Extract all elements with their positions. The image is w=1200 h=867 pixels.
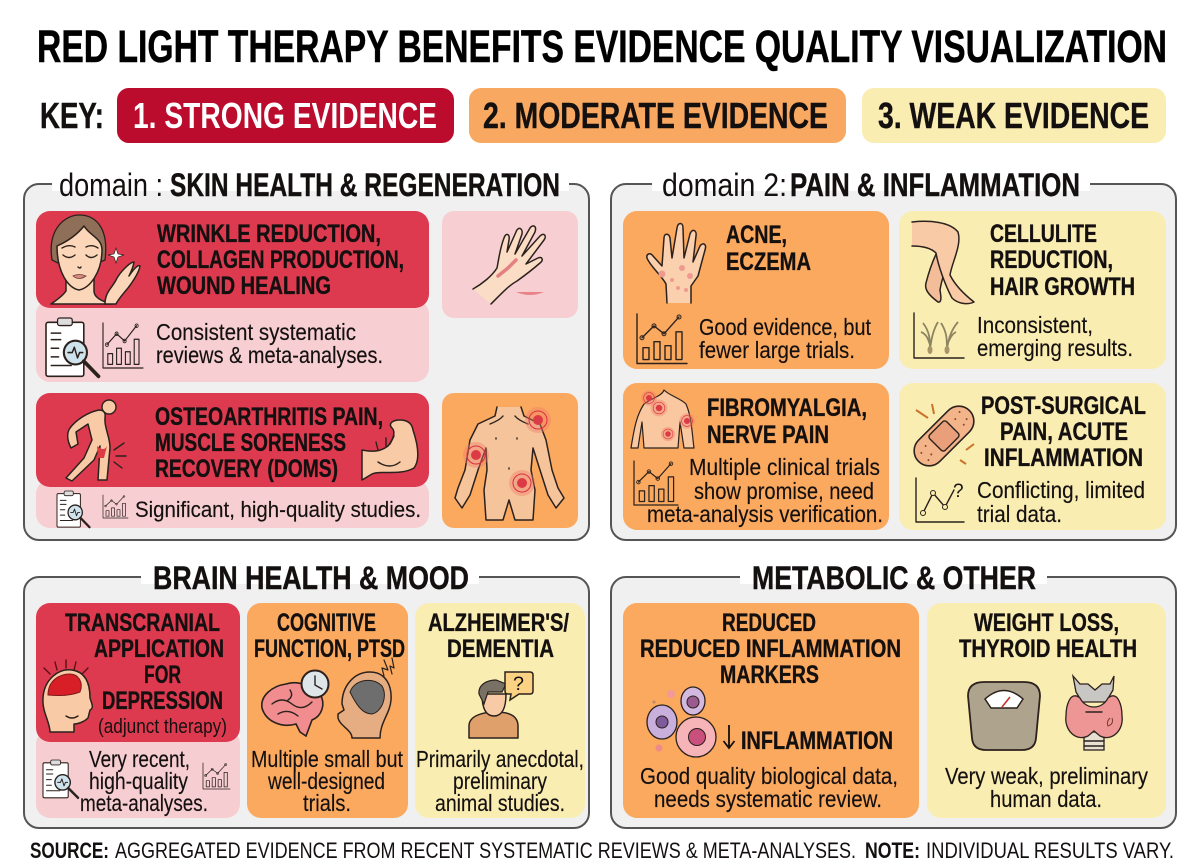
heading: alzheimer's: [428, 609, 569, 663]
heading: transcranial application: APPLICATION: [94, 635, 224, 663]
legend key: KEY:: [40, 95, 104, 136]
icon: chart: [203, 763, 230, 789]
key: strong evidence: [117, 88, 454, 143]
heading: weight loss: THYROID HEALTH: [959, 635, 1137, 663]
footer: source and note: SOURCE:: [30, 838, 109, 863]
text: inflammation evidence: needs systematic review.: [654, 786, 882, 812]
text: post-surgical evidence: Conflicting, limited: [977, 477, 1145, 503]
label: arrow and inflammation: [724, 725, 893, 755]
heading: cellulite hair growth: HAIR GROWTH: [990, 273, 1135, 301]
heading: fibromyalgia nerve pain: FIBROMYALGIA,: [707, 394, 867, 422]
icon: bandage: [908, 400, 980, 472]
text: alzheimer's evidence: Primarily anecdotal,: [416, 746, 584, 772]
icon: hair follicles chart: [914, 313, 964, 358]
label: arrow and inflammation: INFLAMMATION: [741, 727, 893, 755]
legend key: [40, 88, 1166, 143]
panel: brain health and mood: [24, 560, 589, 828]
heading: reduced inflammation: [640, 609, 901, 689]
card: depression evidence background: [36, 730, 240, 818]
card: acne eczema: [623, 211, 889, 369]
heading: alzheimer's: ALZHEIMER'S/: [428, 609, 569, 637]
card: fibromyalgia nerve pain: [623, 383, 889, 530]
heading: reduced inflammation: MARKERS: [720, 661, 819, 689]
heading: post-surgical pain: INFLAMMATION: [984, 444, 1143, 472]
heading: transcranial application: TRANSCRANIAL: [65, 609, 220, 637]
card: post-surgical pain: [899, 383, 1166, 530]
heading: wrinkle reduction: WOUND HEALING: [157, 272, 331, 300]
heading: metabolic: METABOLIC & OTHER: [752, 560, 1036, 596]
heading: cellulite hair growth: REDUCTION,: [990, 246, 1113, 274]
heading: alzheimer's: DEMENTIA: [447, 635, 554, 663]
heading: transcranial application: DEPRESSION: [102, 687, 223, 715]
text: cognitive evidence: Multiple small but: [251, 746, 404, 772]
text: depression evidence: [80, 746, 208, 816]
heading: cognitive function: [254, 609, 405, 663]
icon: clipboard with magnifier: [57, 491, 90, 527]
heading: transcranial application: FOR: [144, 661, 181, 689]
text: fibromyalgia evidence: show promise, need: [694, 478, 874, 504]
heading: osteoarthritis pain: MUSCLE SORENESS: [155, 429, 346, 457]
heading: skin health: SKIN HEALTH & REGENERATION: [170, 167, 560, 203]
panel: skin health and regeneration: [24, 167, 589, 540]
text: wrinkle evidence: reviews & meta-analyses.: [156, 342, 383, 368]
heading: fibromyalgia nerve pain: [707, 394, 867, 449]
text: alzheimer's evidence: preliminary: [453, 768, 547, 794]
card: weight loss thyroid: [927, 603, 1166, 818]
icon: cells: [647, 687, 716, 757]
heading: acne eczema: ECZEMA: [726, 248, 811, 276]
icon: chart: [103, 495, 128, 518]
text: cellulite evidence: Inconsistent,: [977, 312, 1093, 338]
heading: osteoarthritis pain: OSTEOARTHRITIS PAIN,: [155, 403, 383, 431]
heading: wrinkle reduction: COLLAGEN PRODUCTION,: [157, 246, 404, 274]
text: depression evidence: Very recent,: [89, 746, 190, 772]
heading: acne eczema: [726, 221, 811, 276]
icon: brain and clock: [262, 670, 328, 736]
card: cellulite hair growth: [899, 211, 1166, 369]
key: moderate evidence: [469, 88, 846, 143]
heading: cellulite hair growth: [990, 220, 1135, 301]
text: acne evidence: [699, 314, 872, 363]
heading: cellulite hair growth: CELLULITE: [990, 220, 1097, 248]
heading: weight loss: WEIGHT LOSS,: [974, 609, 1119, 637]
icon: chart: [634, 461, 678, 505]
heading: weight loss: [959, 609, 1137, 663]
card: wrinkle evidence background: [36, 300, 429, 382]
heading: skin health: domain :: [59, 167, 163, 203]
icon: woman's face: [51, 215, 140, 304]
key: strong evidence: 1. STRONG EVIDENCE: [133, 95, 437, 136]
text: wrinkle evidence: Consistent systematic: [156, 319, 356, 345]
text: acne evidence: Good evidence, but: [699, 314, 872, 340]
text: inflammation evidence: [640, 763, 898, 812]
icon: chart: [637, 314, 687, 364]
text: weight loss evidence: [945, 763, 1148, 812]
footer: source and note: AGGREGATED EVIDENCE FROM RECENT SYSTEMATIC REVIEWS & META-ANALYSES.: [115, 838, 856, 863]
heading: fibromyalgia nerve pain: NERVE PAIN: [707, 421, 829, 449]
icon: flexed muscle: [362, 420, 418, 480]
footer: source and note: NOTE:: [865, 838, 920, 863]
heading: skin health: [59, 167, 560, 203]
card: wrinkle reduction: [36, 211, 429, 308]
icon: wounded hand: [473, 226, 545, 304]
icon: legs: [912, 221, 974, 304]
heading: pain and inflammation: PAIN & INFLAMMATION: [790, 167, 1080, 203]
text: fibromyalgia evidence: meta-analysis verification.: [647, 501, 883, 527]
heading: post-surgical pain: PAIN, ACUTE: [1000, 418, 1128, 446]
text: cognitive evidence: trials.: [303, 790, 351, 816]
text: alzheimer's evidence: [416, 746, 584, 816]
heading: reduced inflammation: REDUCED INFLAMMATION: [640, 635, 901, 663]
card: transcranial application: [36, 603, 240, 742]
icon: hand with acne: [647, 224, 706, 303]
card: reduced inflammation markers: [623, 603, 919, 818]
text: inflammation evidence: Good quality biological data,: [640, 763, 898, 789]
text: acne evidence: fewer large trials.: [699, 337, 855, 363]
text: cellulite evidence: emerging results.: [977, 335, 1133, 361]
card: osteoarthritis pain: [36, 393, 429, 487]
icon: chart with question mark: ?: [953, 481, 964, 502]
panel: metabolic and other: [611, 560, 1176, 828]
icon: torso with tender points: [631, 390, 695, 448]
icon: thyroid: [1066, 676, 1122, 750]
card: osteoarthritis evidence background: [36, 480, 429, 528]
icon: torso with pain points: [455, 407, 564, 520]
key: moderate evidence: 2. MODERATE EVIDENCE: [483, 95, 828, 136]
heading: osteoarthritis pain: [155, 403, 383, 483]
icon: glowing head: [43, 660, 92, 732]
heading: wrinkle reduction: WRINKLE REDUCTION,: [157, 220, 381, 248]
icon: chart: [103, 323, 143, 368]
text: osteoarthritis evidence: Significant, high-quality studies.: [135, 497, 421, 522]
text: post-surgical evidence: trial data.: [977, 501, 1062, 527]
card: hand with wound: [442, 211, 578, 318]
text: cognitive evidence: [251, 746, 404, 816]
heading: pain and inflammation: domain 2:: [662, 167, 787, 203]
icon: clipboard with magnifier: [43, 760, 78, 798]
heading: cognitive function: FUNCTION, PTSD: [254, 635, 405, 663]
icon: head with dark brain: [338, 658, 394, 738]
heading: pain and inflammation: [662, 167, 1080, 203]
heading: reduced inflammation: REDUCED: [722, 609, 816, 637]
icon: person with question bubble: ?: [513, 674, 524, 695]
text: fibromyalgia evidence: Multiple clinical trials: [689, 454, 880, 480]
text: depression evidence: meta-analyses.: [80, 790, 208, 816]
heading: post-surgical pain: [981, 392, 1146, 472]
card: body with pain points: [442, 393, 578, 528]
heading: acne eczema: ACNE,: [726, 221, 787, 249]
text: post-surgical evidence: [977, 477, 1145, 527]
heading: post-surgical pain: POST-SURGICAL: [981, 392, 1146, 420]
text: weight loss evidence: Very weak, preliminary: [945, 763, 1148, 789]
icon: clipboard with magnifier: [46, 318, 98, 376]
icon: chart with question mark: [916, 478, 964, 522]
icon: person with knee pain: [66, 400, 126, 481]
card: alzheimer's dementia: [415, 603, 585, 818]
text: fibromyalgia evidence: [647, 454, 883, 527]
heading: transcranial application: [65, 609, 227, 738]
text: wrinkle evidence: [156, 319, 383, 368]
heading: brain health: BRAIN HEALTH & MOOD: [153, 560, 469, 596]
text: cognitive evidence: well-designed: [267, 768, 385, 794]
card: cognitive function: [247, 603, 408, 818]
heading: osteoarthritis pain: RECOVERY (DOMS): [155, 455, 338, 483]
text: alzheimer's evidence: animal studies.: [435, 790, 565, 816]
text: cellulite evidence: [977, 312, 1133, 361]
text: depression evidence: high-quality: [89, 768, 188, 794]
heading: wrinkle reduction: [157, 220, 404, 300]
key: weak evidence: [862, 88, 1166, 143]
panel: pain and inflammation: [611, 167, 1176, 540]
icon: person with question bubble: [469, 672, 533, 738]
heading: cognitive function: COGNITIVE: [277, 609, 376, 637]
text: weight loss evidence: human data.: [990, 786, 1102, 812]
heading: transcranial application: (adjunct therapy): [98, 716, 227, 738]
icon: weighing scale: [968, 682, 1040, 750]
